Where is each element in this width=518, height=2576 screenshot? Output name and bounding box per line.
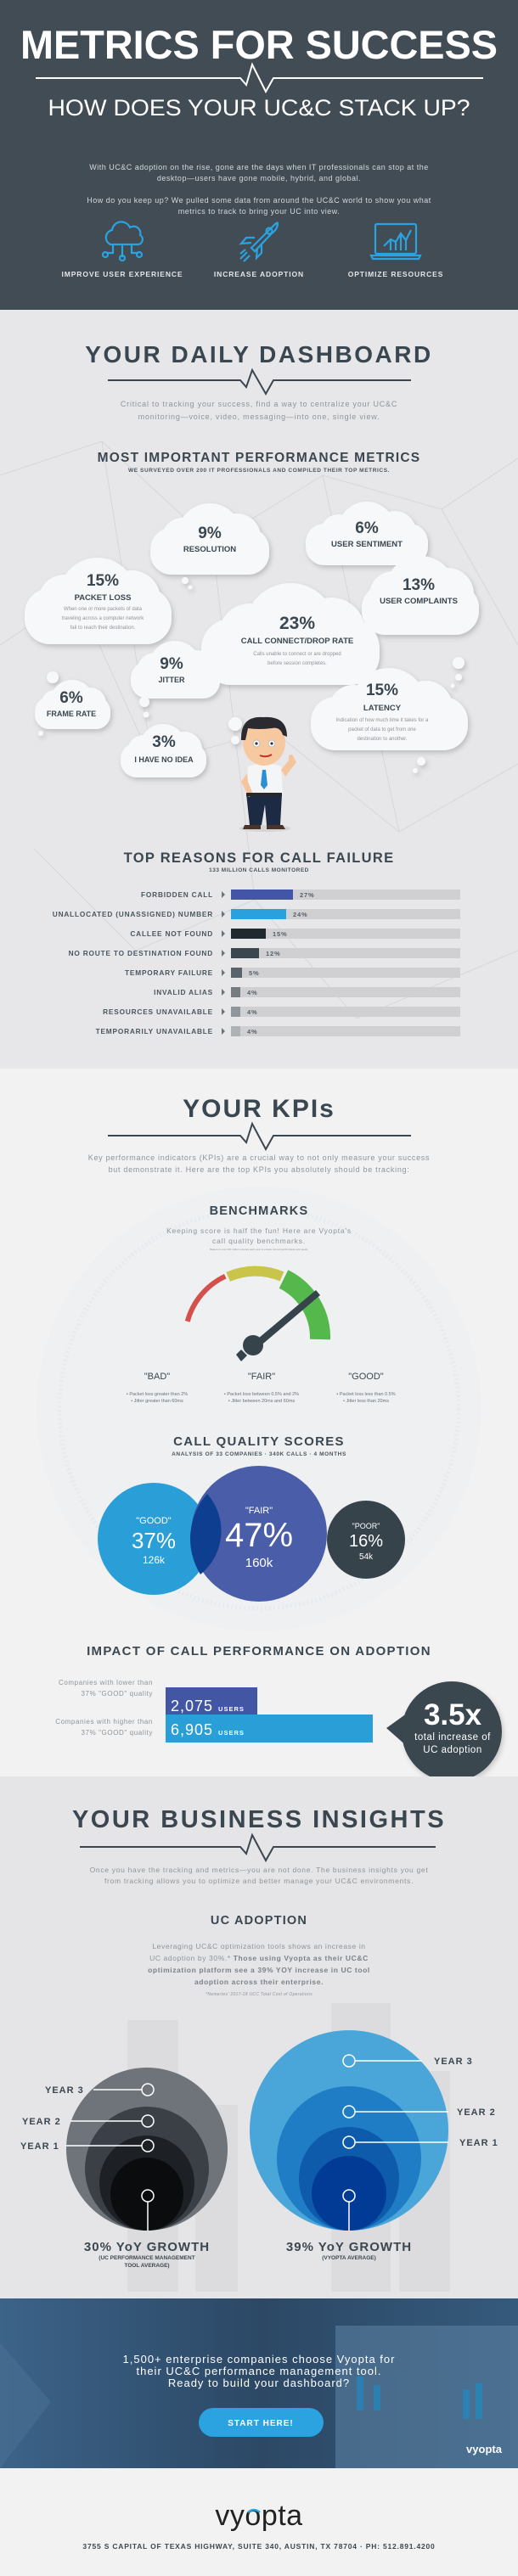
adoption bars: 37% "GOOD" quality: [81, 1729, 153, 1737]
cloud chart: performance metrics: 13%: [403, 576, 435, 594]
dashboard intro text: [121, 400, 397, 421]
cloud chart: performance metrics: 15%: [366, 682, 398, 699]
venn chart: call quality scores: 126k: [143, 1554, 166, 1566]
callout: 3.5x increase: [386, 1681, 502, 1782]
cloud chart: performance metrics: 9%: [198, 525, 222, 542]
bar chart: call failure reasons: NO ROUTE TO DESTINATION FOUND: [69, 949, 213, 957]
venn chart: call quality scores: 54k: [359, 1552, 374, 1562]
bar chart: call failure reasons: 24%: [293, 911, 307, 918]
adoption bars: 2,075 USERS: [171, 1698, 245, 1715]
icon labels: INCREASE ADOPTION: [214, 270, 304, 278]
cloud: resolution: [150, 503, 269, 575]
cloud chart: performance metrics: [25, 502, 479, 777]
heartbeat divider: business insights: [80, 1835, 436, 1860]
cloud: jitter: [131, 641, 220, 699]
section: header background: [0, 0, 518, 310]
venn chart: call quality scores: 37%: [132, 1528, 176, 1553]
bar chart: call failure reasons: UNALLOCATED (UNASSIGNED) NUMBER: [53, 910, 213, 918]
heading: your daily dashboard: YOUR DAILY DASHBOARD: [85, 341, 433, 368]
benchmark labels: [127, 1372, 396, 1404]
bar chart: call failure reasons: 15%: [273, 930, 287, 938]
venn chart: call quality scores: [98, 1466, 405, 1602]
dashboard intro text: monitoring—voice, video, messaging—into one, single view.: [138, 412, 380, 421]
benchmark labels: • Packet loss between 0.5% and 2%: [224, 1392, 299, 1397]
benchmarks text: [166, 1226, 352, 1251]
benchmark labels: "GOOD": [348, 1372, 384, 1382]
heading: your KPIs: YOUR KPIs: [183, 1095, 335, 1123]
call failure subheading: 133 MILLION CALLS MONITORED: [209, 867, 309, 873]
intro text: How do you keep up? We pulled some data from around the UC&C world to show you what: [87, 196, 431, 205]
callout: 3.5x increase: total increase of: [414, 1732, 491, 1743]
chart: Vyopta growth: YEAR 2: [457, 2107, 496, 2118]
CTA text: Ready to build your dashboard?: [168, 2377, 350, 2389]
bar chart: call failure reasons: 4%: [247, 1028, 257, 1035]
call quality subheading: ANALYSIS OF 33 COMPANIES · 340K CALLS · 4 MONTHS: [172, 1451, 346, 1457]
section: KPIs background: [0, 1069, 518, 1776]
chart: UC performance management growth: [20, 2068, 228, 2269]
heading: UC adoption: UC ADOPTION: [211, 1914, 307, 1928]
chart: UC performance management growth: (UC PERFORMANCE MANAGEMENT: [99, 2255, 195, 2261]
cloud chart: performance metrics: packet of data to get from one: [348, 727, 417, 732]
CTA text: their UC&C performance management tool.: [136, 2365, 382, 2377]
UC adoption text: Leveraging UC&C optimization tools shows an increase in: [152, 1942, 366, 1950]
section: call to action banner: [0, 2298, 518, 2468]
UC adoption text: optimization platform see a 39% YOY increase in UC tool: [148, 1966, 370, 1974]
chart: Vyopta growth: YEAR 1: [459, 2138, 498, 2148]
cloud chart: performance metrics: LATENCY: [363, 704, 402, 713]
benchmark labels: • Jitter between 20ms and 60ms: [228, 1399, 295, 1404]
UC adoption text: *Nemertes' 2017-18 UCC Total Cost of Operations: [206, 1992, 312, 1997]
chart: UC performance management growth: TOOL AVERAGE): [124, 2263, 170, 2269]
cloud: user complaints: [362, 556, 479, 635]
button: start here: START HERE!: [228, 2419, 294, 2428]
logo: small vyopta: vyopta: [466, 2443, 503, 2455]
cloud chart: performance metrics: before session completes.: [267, 661, 327, 666]
intro text: [87, 163, 431, 216]
cloud chart: performance metrics: 3%: [152, 733, 176, 751]
section: daily dashboard background: [0, 310, 518, 1069]
cloud chart: performance metrics: USER SENTIMENT: [331, 540, 403, 549]
venn chart: call quality scores: 160k: [245, 1556, 273, 1570]
cloud: call connect: [201, 583, 380, 685]
icon labels: [61, 270, 443, 278]
icon: laptop chart: [371, 224, 420, 259]
cloud chart: performance metrics: Calls unable to connect or are dropped: [253, 652, 341, 657]
illustration: businessman: [239, 717, 296, 832]
bar chart: call failure reasons: 4%: [247, 989, 257, 996]
cloud: frame rate: [35, 680, 110, 729]
logo: vyopta: vyopta: [215, 2500, 303, 2532]
venn chart: call quality scores: 47%: [225, 1517, 293, 1554]
cloud chart: performance metrics: destination to another.: [357, 737, 408, 742]
cloud chart: performance metrics: Indication of how much time it takes for a: [336, 718, 429, 723]
chart: Vyopta growth: (VYOPTA AVERAGE): [322, 2255, 376, 2261]
bar chart: call failure reasons: INVALID ALIAS: [154, 988, 213, 996]
adoption bars: 37% "GOOD" quality: [81, 1690, 153, 1698]
benchmark labels: "BAD": [144, 1372, 170, 1382]
KPI intro text: but demonstrate it. Here are the top KPIs you absolutely should be tracking:: [109, 1165, 409, 1174]
bar chart: call failure reasons: RESOURCES UNAVAILABLE: [103, 1007, 213, 1016]
footer address: 3755 S CAPITAL OF TEXAS HIGHWAY, SUITE 340, AUSTIN, TX 78704 · PH: 512.891.4200: [82, 2542, 436, 2551]
cloud: packet loss: [25, 558, 172, 644]
section: footer: [0, 2468, 518, 2576]
cloud chart: performance metrics: JITTER: [158, 676, 185, 684]
heading: most important performance metrics: MOST IMPORTANT PERFORMANCE METRICS: [98, 451, 420, 465]
thought bubbles: [38, 577, 465, 773]
venn chart: call quality scores: "FAIR": [245, 1506, 273, 1516]
venn chart: call quality scores: "POOR": [352, 1522, 380, 1530]
chart: UC performance management growth: YEAR 1: [20, 2141, 59, 2152]
cloud chart: performance metrics: PACKET LOSS: [75, 593, 131, 603]
benchmarks text: Keeping score is half the fun! Here are Vyopta's: [166, 1226, 352, 1235]
button: start here: [199, 2408, 324, 2437]
heading: impact of call performance on adoption: IMPACT OF CALL PERFORMANCE ON ADOPTION: [87, 1644, 431, 1658]
icon labels: IMPROVE USER EXPERIENCE: [61, 270, 183, 278]
UC adoption text: UC adoption by 30%.* Those using Vyopta as their UC&C: [149, 1954, 369, 1962]
bar chart: call failure reasons: TEMPORARILY UNAVAILABLE: [96, 1027, 213, 1035]
adoption bars: 6,905 USERS: [171, 1721, 245, 1738]
UC adoption text: [148, 1942, 370, 1997]
chart: UC performance management growth: YEAR 3: [45, 2085, 84, 2096]
KPI intro text: Key performance indicators (KPIs) are a crucial way to not only measure your success: [88, 1153, 430, 1162]
venn chart: call quality scores: 16%: [349, 1532, 383, 1551]
subtitle: HOW DOES YOUR UC&C STACK UP?: [48, 95, 470, 121]
intro text: desktop—users have gone mobile, hybrid, and global.: [157, 174, 361, 182]
section: business insights background: [0, 1776, 518, 2298]
heading: call quality scores: CALL QUALITY SCORES: [173, 1434, 345, 1449]
business insights intro text: from tracking allows you to optimize and better manage your UC&C environments.: [104, 1877, 414, 1885]
CTA text: [123, 2353, 395, 2389]
dashboard intro text: Critical to tracking your success, find a way to centralize your UC&C: [121, 400, 397, 408]
chart: Vyopta growth: YEAR 3: [434, 2057, 473, 2067]
cloud chart: performance metrics: When one or more packets of data: [64, 607, 143, 612]
bar chart: call failure reasons: [53, 890, 460, 1036]
title: METRICS FOR SUCCESS: [20, 22, 498, 67]
heading: your business insights: YOUR BUSINESS INSIGHTS: [72, 1806, 446, 1833]
gauge: [188, 1271, 320, 1361]
adoption bars: Companies with higher than: [55, 1718, 153, 1726]
bar chart: call failure reasons: 4%: [247, 1008, 257, 1016]
adoption bars: [55, 1679, 373, 1743]
icon: cloud network: [103, 222, 143, 261]
cloud chart: performance metrics: 6%: [355, 519, 379, 537]
bar chart: call failure reasons: CALLEE NOT FOUND: [130, 929, 213, 938]
chart: Vyopta growth: 39% YoY GROWTH: [286, 2240, 412, 2254]
heading: benchmarks: BENCHMARKS: [210, 1204, 308, 1218]
benchmarks text: Based on over 400 million minutes each year to ensure current performance and goals.: [210, 1248, 308, 1251]
cloud chart: performance metrics: traveling across a computer network: [62, 616, 144, 621]
bar chart: call failure reasons: 5%: [249, 969, 259, 977]
benchmark labels: • Jitter less than 20ms: [343, 1399, 389, 1404]
business insights intro text: Once you have the tracking and metrics—you are not done. The business insights you get: [90, 1866, 428, 1874]
cloud: no idea: [121, 724, 206, 777]
cloud chart: performance metrics: CALL CONNECT/DROP RATE: [241, 637, 353, 646]
cloud: latency: [311, 668, 468, 750]
cloud chart: performance metrics: 6%: [59, 689, 83, 707]
KPI intro text: [88, 1153, 430, 1174]
adoption bars: Companies with lower than: [59, 1679, 153, 1686]
bar chart: call failure reasons: 27%: [300, 891, 314, 899]
heartbeat divider: dashboard: [108, 370, 411, 394]
intro text: With UC&C adoption on the rise, gone are the days when IT professionals can stop at the: [89, 163, 429, 171]
business insights intro text: [90, 1866, 428, 1885]
CTA text: 1,500+ enterprise companies choose Vyopta for: [123, 2353, 395, 2366]
cloud chart: performance metrics: 9%: [160, 655, 183, 673]
icon labels: OPTIMIZE RESOURCES: [348, 270, 443, 278]
bar chart: call failure reasons: 12%: [266, 950, 280, 957]
icon: rocket: [240, 222, 278, 261]
bar chart: call failure reasons: TEMPORARY FAILURE: [125, 968, 213, 977]
cloud chart: performance metrics: USER COMPLAINTS: [380, 597, 458, 606]
chart: Vyopta growth: [250, 2030, 498, 2261]
cloud chart: performance metrics: RESOLUTION: [183, 545, 236, 554]
benchmark labels: • Packet loss less than 0.5%: [336, 1392, 396, 1397]
cloud: user sentiment: [306, 502, 428, 565]
UC adoption text: adoption across their enterprise.: [194, 1978, 324, 1986]
intro text: metrics to track to bring your UC into view.: [178, 207, 340, 216]
venn chart: call quality scores: "GOOD": [136, 1516, 172, 1526]
heartbeat divider: KPIs: [108, 1124, 411, 1149]
metrics subheading: WE SURVEYED OVER 200 IT PROFESSIONALS AND COMPILED THEIR TOP METRICS.: [128, 468, 390, 474]
benchmark labels: • Jitter greater than 60ms: [131, 1399, 183, 1404]
bar chart: call failure reasons: FORBIDDEN CALL: [141, 890, 213, 899]
cloud chart: performance metrics: FRAME RATE: [47, 710, 96, 718]
callout: 3.5x increase: 3.5x: [424, 1698, 482, 1731]
benchmark labels: • Packet loss greater than 2%: [127, 1392, 188, 1397]
benchmark labels: "FAIR": [248, 1372, 275, 1382]
chart: UC performance management growth: YEAR 2: [22, 2117, 61, 2127]
heartbeat divider: header: [36, 65, 483, 92]
cloud chart: performance metrics: 23%: [279, 614, 315, 633]
benchmarks text: call quality benchmarks.: [212, 1237, 306, 1245]
callout: 3.5x increase: UC adoption: [423, 1745, 482, 1755]
cloud chart: performance metrics: fail to reach their destination.: [70, 626, 136, 631]
cloud chart: performance metrics: I HAVE NO IDEA: [134, 755, 194, 764]
cloud chart: performance metrics: 15%: [87, 572, 119, 590]
heading: top reasons for call failure: TOP REASONS FOR CALL FAILURE: [124, 850, 394, 866]
chart: UC performance management growth: 30% YoY GROWTH: [84, 2240, 210, 2254]
